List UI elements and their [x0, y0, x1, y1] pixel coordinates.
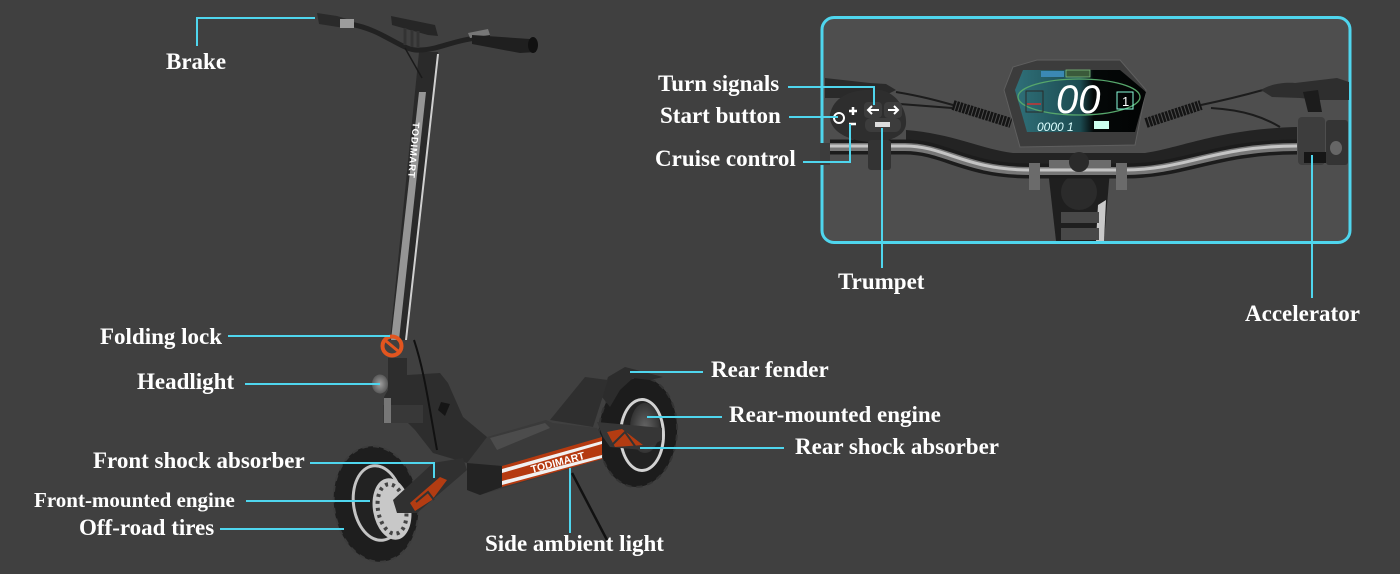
handlebar [317, 13, 538, 78]
callout: Rear fender: Rear fender [711, 357, 829, 382]
rear wheel [595, 374, 681, 490]
odometer: 0000 1 [1037, 120, 1074, 134]
stem brand text: TODIMART [405, 122, 421, 179]
callout: Rear-mounted engine: Rear-mounted engine [729, 402, 941, 427]
callout: Headlight: Headlight [137, 369, 234, 394]
callout: Brake [166, 18, 315, 74]
gear number: 1 [1122, 94, 1129, 109]
deck [467, 420, 602, 495]
callout: Accelerator: Accelerator [1245, 301, 1360, 326]
right brake and throttle [1261, 78, 1349, 165]
brake disc [368, 475, 416, 543]
folding lock [382, 336, 402, 356]
deck front end [467, 463, 502, 495]
callout: Folding lock: Folding lock [100, 324, 222, 349]
callout: Front shock absorber [93, 448, 434, 478]
stem [390, 52, 439, 340]
callout: Cruise control: Cruise control [655, 146, 796, 171]
stem close-up [1048, 170, 1110, 241]
callout: Turn signals: Turn signals [658, 71, 779, 96]
callout: Start button: Start button [660, 103, 781, 128]
battery [1094, 121, 1109, 129]
panel: handlebar close-up [820, 18, 1350, 242]
front swing arm [393, 458, 467, 513]
callout: Cruise control [655, 124, 850, 171]
cables [896, 90, 1280, 127]
callout: Side ambient light: Side ambient light [485, 531, 664, 556]
handlebar tube [830, 127, 1297, 171]
speed reading: 00 [1056, 78, 1100, 122]
side ambient strip [502, 437, 602, 487]
front wheel [326, 441, 426, 567]
callout: Rear shock absorber: Rear shock absorber [795, 434, 999, 459]
kickstand [572, 473, 607, 540]
deck tread [490, 423, 550, 450]
callout: Turn signals [658, 71, 874, 105]
callout: Front-mounted engine: Front-mounted engine [34, 488, 235, 512]
callout: Off-road tires: Off-road tires [79, 515, 214, 540]
headlight [372, 374, 388, 394]
rear fender [602, 367, 663, 407]
strip brand: TODIMART [530, 450, 587, 476]
rear footrest [550, 377, 608, 427]
rear swing arm [597, 422, 662, 450]
display [1004, 60, 1146, 147]
scooter [317, 13, 681, 567]
left brake lever [825, 78, 896, 98]
callout: Brake: Brake [166, 49, 226, 74]
brake cable [414, 340, 437, 450]
callout: Trumpet: Trumpet [838, 269, 925, 294]
left control pod [820, 90, 906, 170]
front column [383, 358, 495, 463]
clamps [1029, 152, 1127, 190]
callout: Front shock absorber: Front shock absorber [93, 448, 305, 473]
